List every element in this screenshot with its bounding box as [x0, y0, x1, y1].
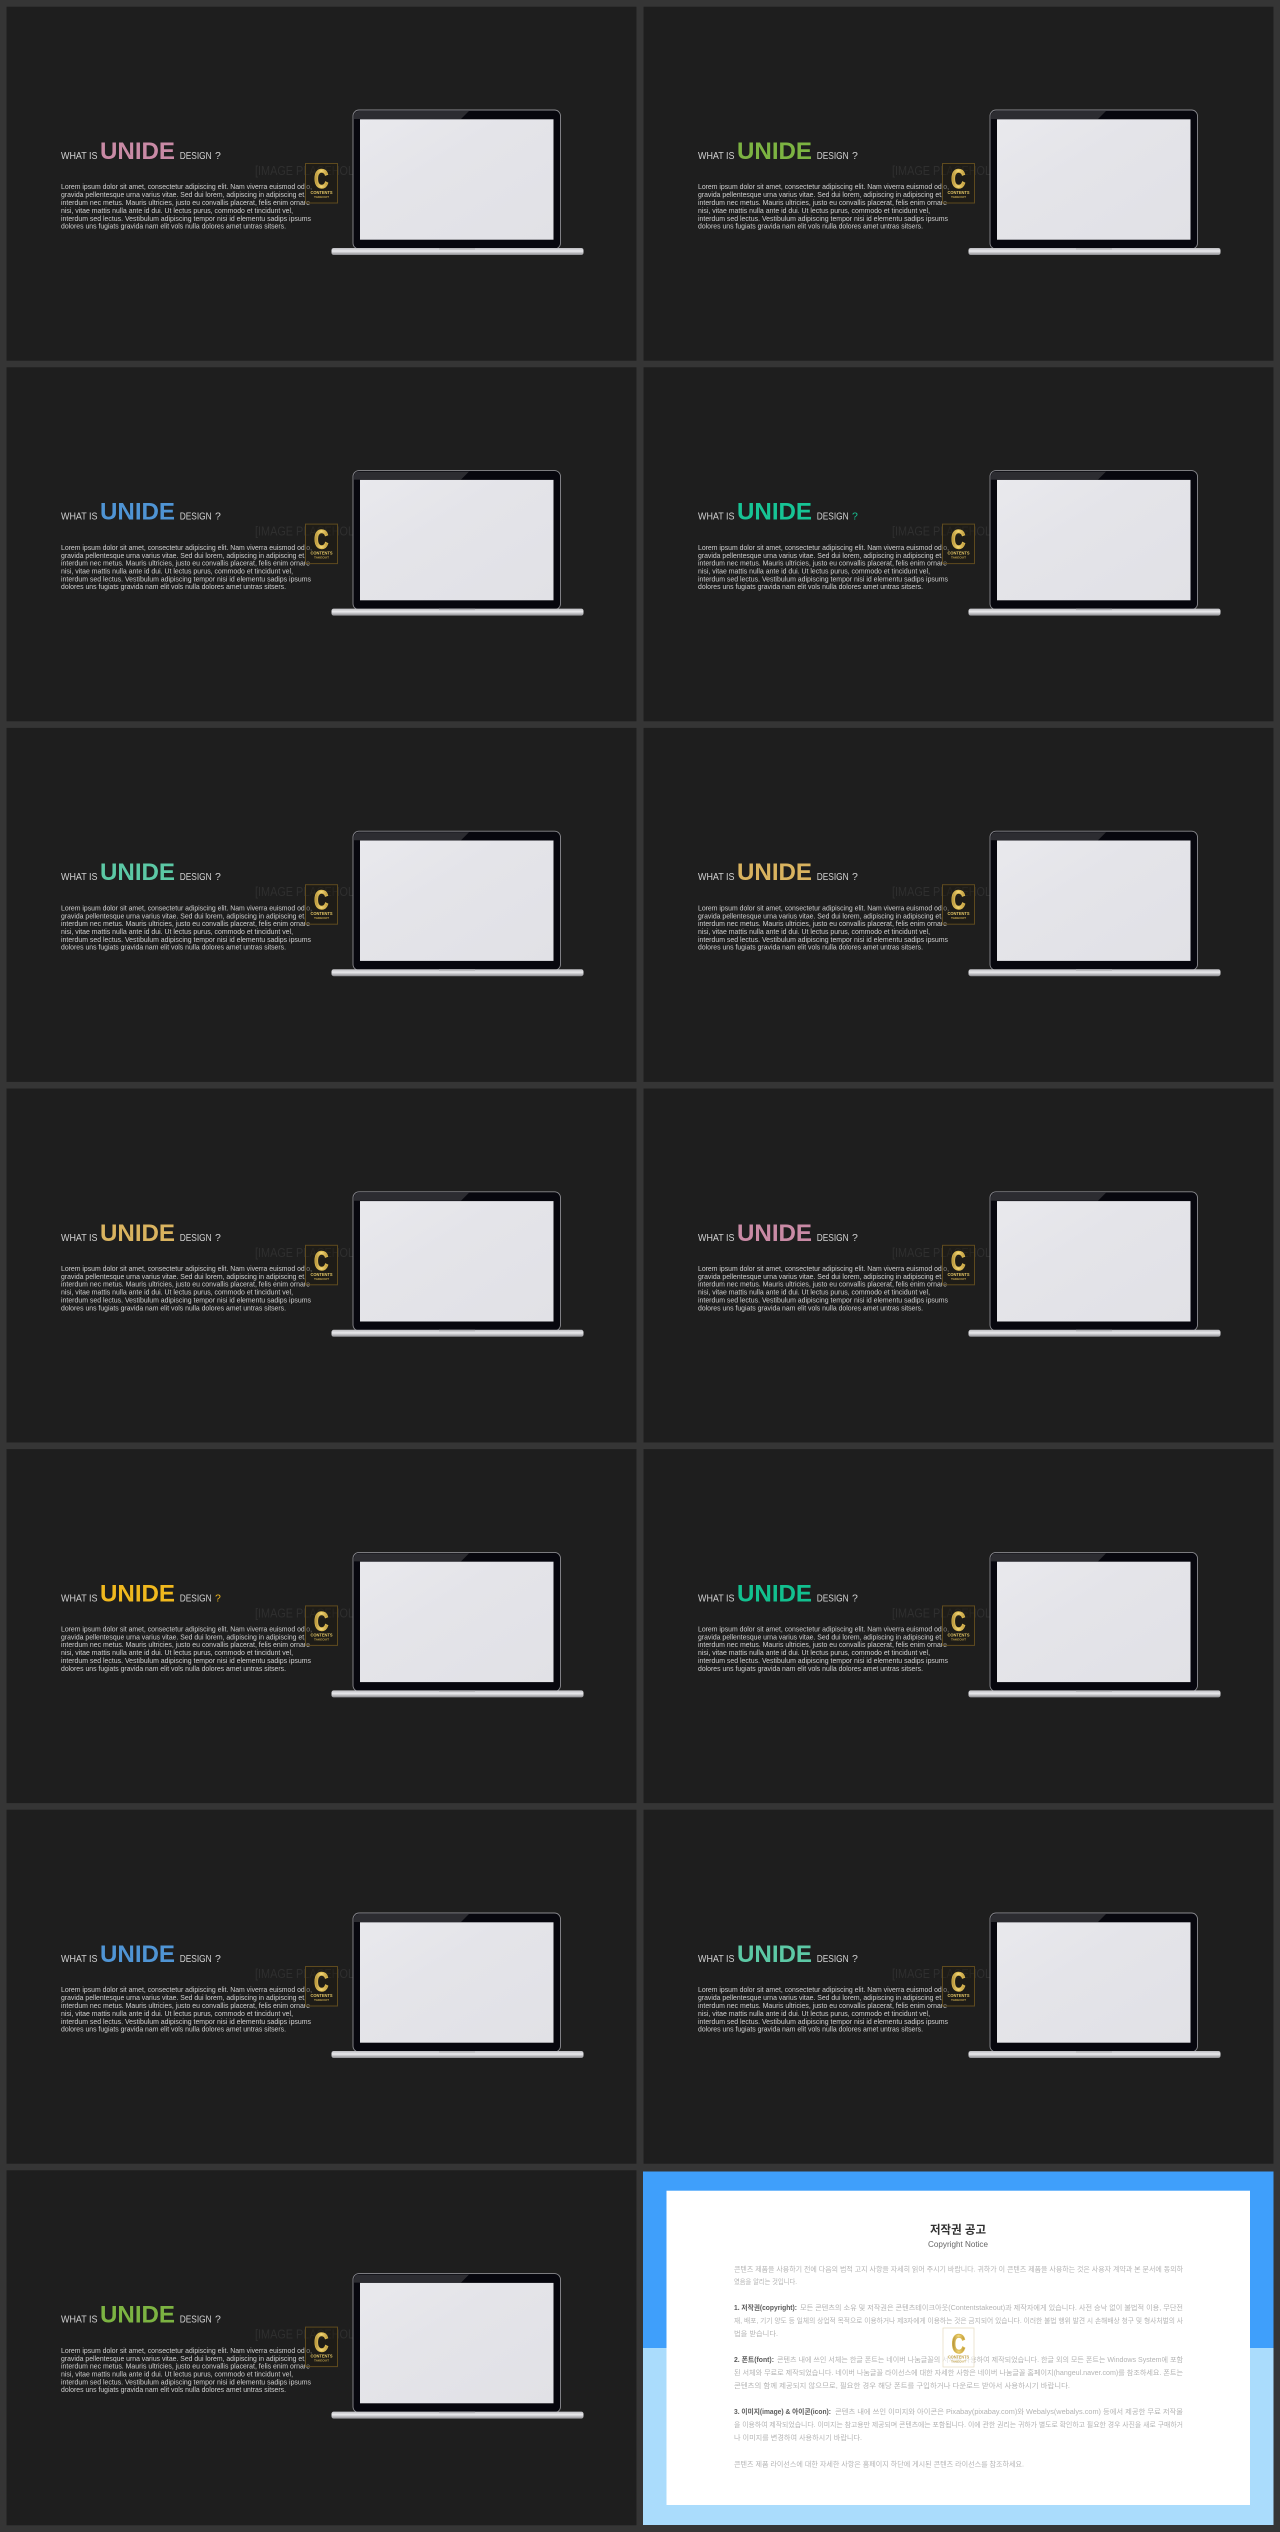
badge: contents takeout centre	[943, 2328, 974, 2367]
image placeholder watermark: [IMAGE PLACEHOLDER]	[255, 1966, 380, 1981]
badge: contents takeout	[942, 1245, 974, 1285]
body text: interdum sed lectus. Vestibulum adipiscing tempor nisi id elementu sadips ipsums	[61, 1656, 311, 1665]
body text: gravida pellentesque urna varius vitae. Sed dui lorem, adipiscing in adipiscing et,	[61, 911, 306, 920]
heading	[61, 1580, 221, 1607]
heading	[698, 1941, 858, 1968]
body text: interdum sed lectus. Vestibulum adipiscing tempor nisi id elementu sadips ipsums	[698, 1296, 948, 1305]
body text	[61, 1264, 312, 1312]
body text	[61, 903, 312, 952]
body text: dolores uns fugiats gravida nam elit vols nulla dolores amet untras sitsers.	[61, 1303, 286, 1312]
laptop	[332, 2274, 584, 2419]
section 2 font: 콘텐츠의 함께 제공되지 않으므로, 필요한 경우 해당 폰트를 구입하거나 다운로드 받아서 사용하시기 바랍니다.	[734, 2381, 1070, 2390]
panel: slide 1 pink	[6, 7, 636, 361]
heading: WHAT IS	[698, 150, 734, 162]
heading: DESIGN	[817, 1232, 849, 1244]
badge: contents takeout: TAKEOUT	[314, 195, 329, 199]
badge: contents takeout	[306, 524, 338, 564]
badge: contents takeout: C	[951, 164, 966, 194]
body text	[61, 182, 312, 230]
laptop	[968, 1913, 1220, 2058]
image placeholder watermark: [IMAGE PLACEHOLDER]	[892, 524, 1017, 539]
badge: contents takeout: C	[951, 1606, 966, 1636]
heading: UNIDE	[100, 859, 175, 886]
badge: contents takeout	[306, 1966, 338, 2006]
body text: nisi, vitae mattis nulla ante id dui. Ut lectus purus, commodo et tincidunt vel,	[61, 2369, 293, 2378]
body text: dolores uns fugiats gravida nam elit vols nulla dolores amet untras sitsers.	[61, 582, 286, 591]
body text: gravida pellentesque urna varius vitae. Sed dui lorem, adipiscing in adipiscing et,	[698, 1633, 943, 1642]
badge: contents takeout: TAKEOUT	[314, 916, 329, 920]
laptop	[968, 110, 1220, 255]
body text: gravida pellentesque urna varius vitae. Sed dui lorem, adipiscing in adipiscing et,	[61, 1272, 306, 1281]
image placeholder watermark: [IMAGE PLACEHOLDER]	[255, 524, 380, 539]
body text: nisi, vitae mattis nulla ante id dui. Ut lectus purus, commodo et tincidunt vel,	[698, 2009, 930, 2018]
body text: interdum nec metus. Mauris ultricies, justo eu convallis placerat, felis enim ornare	[61, 919, 310, 928]
body text: interdum sed lectus. Vestibulum adipiscing tempor nisi id elementu sadips ipsums	[698, 2017, 948, 2026]
body text: dolores uns fugiats gravida nam elit vols nulla dolores amet untras sitsers.	[698, 2024, 923, 2034]
body text	[698, 1625, 949, 1673]
heading: ?	[852, 871, 858, 883]
laptop	[968, 831, 1220, 976]
badge: contents takeout: TAKEOUT	[314, 2359, 329, 2363]
body text	[698, 1985, 949, 2034]
heading: DESIGN	[817, 511, 849, 523]
image placeholder watermark: [IMAGE PLACEHOLDER]	[255, 884, 380, 899]
heading: WHAT IS	[698, 1232, 734, 1244]
badge: contents takeout	[942, 1606, 974, 1645]
body text: gravida pellentesque urna varius vitae. Sed dui lorem, adipiscing in adipiscing et,	[698, 911, 943, 920]
body text: dolores uns fugiats gravida nam elit vols nulla dolores amet untras sitsers.	[698, 582, 923, 591]
image placeholder watermark: [IMAGE PLACEHOLDER]	[255, 1245, 380, 1260]
heading: DESIGN	[180, 1592, 212, 1604]
body text: nisi, vitae mattis nulla ante id dui. Ut lectus purus, commodo et tincidunt vel,	[698, 206, 930, 215]
body text	[698, 903, 949, 952]
panel: slide 4 teal	[644, 367, 1274, 721]
badge: contents takeout: CONTENTS	[310, 911, 333, 916]
heading	[698, 859, 858, 886]
panel: slide 10 teal	[644, 1449, 1274, 1803]
laptop	[968, 1552, 1220, 1697]
badge: contents takeout: C	[951, 885, 966, 915]
badge: contents takeout: CONTENTS	[310, 1632, 333, 1637]
heading: DESIGN	[817, 1953, 849, 1965]
image placeholder watermark: [IMAGE PLACEHOLDER]	[255, 1605, 380, 1620]
heading: DESIGN	[180, 150, 212, 162]
heading	[698, 499, 858, 526]
badge: contents takeout: C	[314, 1606, 328, 1636]
section 1 copyright: 모든 콘텐츠의 소유 및 저작권은 콘텐츠테이크아웃(Contentstakeout)과 제작자에게 있습니다. 사전 승낙 없이 불법적 이용, 무단전	[800, 2303, 1183, 2312]
badge: contents takeout: CONTENTS	[310, 1993, 333, 1998]
body text: dolores uns fugiats gravida nam elit vols nulla dolores amet untras sitsers.	[61, 943, 286, 952]
badge: contents takeout	[306, 2327, 338, 2367]
heading: ?	[852, 1232, 858, 1244]
badge: contents takeout: TAKEOUT	[314, 1277, 329, 1281]
intro paragraph: 였음을 알리는 것입니다.	[734, 2277, 797, 2286]
heading: WHAT IS	[61, 1232, 98, 1244]
heading: DESIGN	[817, 871, 849, 883]
heading: WHAT IS	[61, 871, 98, 883]
heading: ?	[215, 1232, 221, 1244]
body text: dolores uns fugiats gravida nam elit vols nulla dolores amet untras sitsers.	[61, 222, 286, 230]
laptop	[332, 1913, 584, 2058]
body text: interdum nec metus. Mauris ultricies, justo eu convallis placerat, felis enim ornare	[61, 2361, 310, 2370]
badge: contents takeout centre: C	[952, 2329, 966, 2359]
badge: contents takeout: C	[314, 885, 328, 915]
badge: contents takeout	[942, 524, 974, 564]
laptop	[332, 1552, 584, 1697]
heading: UNIDE	[100, 138, 175, 165]
body text: nisi, vitae mattis nulla ante id dui. Ut lectus purus, commodo et tincidunt vel,	[61, 206, 293, 215]
laptop	[332, 110, 584, 255]
section 3 image and icon: 콘텐츠 내에 쓰인 이미지와 아이콘은 Pixabay(pixabay.com)와 Webalys(webalys.com) 등에서 제공한 무료 저작물	[835, 2407, 1184, 2416]
section 3 image and icon: 을 이용하여 제작되었습니다. 이미지는 참고용만 제공되며 콘텐츠에는 포함됩니다. 이에 관한 권리는 귀하가 별도로 확인하고 필요한 경우 사진을 새로 구매하거	[734, 2420, 1183, 2429]
body text: interdum nec metus. Mauris ultricies, justo eu convallis placerat, felis enim ornare	[61, 1280, 310, 1289]
heading: ?	[852, 1592, 858, 1604]
heading: WHAT IS	[698, 1953, 734, 1965]
section 1 copyright: 재, 배포, 기기 양도 등 일체의 상업적 목적으로 이용하거나 제3자에게 이용하는 것은 금지되어 있습니다. 이러한 불법 행위 발견 시 손해배상 청구 및 형사처벌의 사	[734, 2316, 1184, 2325]
laptop	[332, 831, 584, 976]
section 1 copyright: 1. 저작권(copyright):	[734, 2303, 797, 2312]
badge: contents takeout: CONTENTS	[310, 551, 333, 556]
body text: interdum nec metus. Mauris ultricies, justo eu convallis placerat, felis enim ornare	[61, 198, 310, 207]
body text: dolores uns fugiats gravida nam elit vols nulla dolores amet untras sitsers.	[61, 2024, 286, 2034]
body text: Lorem ipsum dolor sit amet, consectetur adipiscing elit. Nam viverra euismod odio,	[61, 1264, 312, 1273]
heading: UNIDE	[100, 1941, 175, 1968]
body text: gravida pellentesque urna varius vitae. Sed dui lorem, adipiscing in adipiscing et,	[698, 1993, 943, 2002]
body text: nisi, vitae mattis nulla ante id dui. Ut lectus purus, commodo et tincidunt vel,	[698, 927, 930, 936]
body text: Lorem ipsum dolor sit amet, consectetur adipiscing elit. Nam viverra euismod odio,	[698, 1264, 949, 1273]
body text: interdum nec metus. Mauris ultricies, justo eu convallis placerat, felis enim ornare	[698, 919, 947, 928]
body text: Lorem ipsum dolor sit amet, consectetur adipiscing elit. Nam viverra euismod odio,	[698, 1625, 949, 1634]
panel: slide 12 mint	[644, 1810, 1274, 2164]
body text: dolores uns fugiats gravida nam elit vols nulla dolores amet untras sitsers.	[698, 943, 923, 952]
badge: contents takeout: CONTENTS	[948, 190, 970, 195]
heading: WHAT IS	[61, 1953, 98, 1965]
badge: contents takeout: CONTENTS	[310, 2354, 333, 2359]
badge: contents takeout: TAKEOUT	[951, 916, 966, 920]
heading: ?	[215, 150, 221, 162]
badge: contents takeout: C	[951, 1967, 966, 1997]
panel: slide 13 green	[6, 2170, 636, 2525]
copyright title: 저작권 공고	[930, 2222, 986, 2236]
body text: Lorem ipsum dolor sit amet, consectetur adipiscing elit. Nam viverra euismod odio,	[61, 2346, 312, 2355]
heading: UNIDE	[737, 859, 812, 886]
body text: Lorem ipsum dolor sit amet, consectetur adipiscing elit. Nam viverra euismod odio,	[61, 543, 312, 552]
badge: contents takeout	[942, 164, 974, 203]
section 2 font: 된 서체와 무료로 제작되었습니다. 네이버 나눔글꼴 라이선스에 대한 자세한 사항은 네이버 나눔글꼴 홈페이지(hangeul.naver.com)를 참조하세요. 폰트는	[734, 2368, 1184, 2377]
badge: contents takeout: C	[314, 2328, 328, 2358]
section 1 copyright: 법을 받습니다.	[734, 2329, 778, 2338]
heading	[61, 1941, 221, 1968]
badge: contents takeout: TAKEOUT	[951, 1637, 966, 1641]
heading: UNIDE	[100, 499, 175, 526]
body text: interdum nec metus. Mauris ultricies, justo eu convallis placerat, felis enim ornare	[698, 1280, 947, 1289]
badge: contents takeout: C	[951, 525, 966, 555]
body text	[698, 543, 949, 591]
badge: contents takeout	[306, 885, 338, 924]
section 3 image and icon	[734, 2407, 1184, 2442]
body text: nisi, vitae mattis nulla ante id dui. Ut lectus purus, commodo et tincidunt vel,	[61, 566, 293, 575]
badge: contents takeout: C	[314, 1967, 328, 1997]
heading: UNIDE	[737, 138, 812, 165]
image placeholder watermark: [IMAGE PLACEHOLDER]	[892, 884, 1017, 899]
panel: slide 5 mint	[6, 728, 636, 1082]
badge: contents takeout: CONTENTS	[310, 1272, 333, 1277]
body text: nisi, vitae mattis nulla ante id dui. Ut lectus purus, commodo et tincidunt vel,	[698, 566, 930, 575]
badge: contents takeout: CONTENTS	[948, 1272, 970, 1277]
badge: contents takeout: TAKEOUT	[951, 1998, 966, 2002]
body text: gravida pellentesque urna varius vitae. Sed dui lorem, adipiscing in adipiscing et,	[698, 190, 943, 199]
heading: UNIDE	[737, 1220, 812, 1247]
body text: interdum sed lectus. Vestibulum adipiscing tempor nisi id elementu sadips ipsums	[698, 1656, 948, 1665]
heading: DESIGN	[180, 511, 212, 523]
body text	[61, 1625, 312, 1673]
body text: dolores uns fugiats gravida nam elit vols nulla dolores amet untras sitsers.	[61, 2385, 286, 2394]
body text: gravida pellentesque urna varius vitae. Sed dui lorem, adipiscing in adipiscing et,	[61, 551, 306, 560]
badge: contents takeout: TAKEOUT	[314, 556, 329, 560]
body text: gravida pellentesque urna varius vitae. Sed dui lorem, adipiscing in adipiscing et,	[698, 551, 943, 560]
panel: slide 6 gold	[644, 728, 1274, 1082]
heading: WHAT IS	[61, 2314, 98, 2326]
image placeholder watermark: [IMAGE PLACEHOLDER]	[892, 1966, 1017, 1981]
heading: DESIGN	[817, 150, 849, 162]
panel: slide 7 gold	[6, 1088, 636, 1442]
heading: WHAT IS	[61, 1592, 98, 1604]
panel: slide 3 blue	[6, 367, 636, 721]
heading: DESIGN	[180, 871, 212, 883]
heading: ?	[852, 150, 858, 162]
section 3 image and icon: 나 이미지를 변경하여 사용하시기 바랍니다.	[734, 2433, 862, 2442]
badge: contents takeout: CONTENTS	[948, 911, 970, 916]
body text: interdum nec metus. Mauris ultricies, justo eu convallis placerat, felis enim ornare	[698, 198, 947, 207]
body text: interdum sed lectus. Vestibulum adipiscing tempor nisi id elementu sadips ipsums	[61, 1296, 311, 1305]
heading: ?	[215, 1953, 221, 1965]
body text: interdum sed lectus. Vestibulum adipiscing tempor nisi id elementu sadips ipsums	[61, 214, 311, 223]
heading: UNIDE	[100, 1580, 175, 1607]
body text: interdum sed lectus. Vestibulum adipiscing tempor nisi id elementu sadips ipsums	[698, 574, 948, 583]
heading: ?	[215, 2314, 221, 2326]
body text: Lorem ipsum dolor sit amet, consectetur adipiscing elit. Nam viverra euismod odio,	[61, 903, 312, 912]
heading: ?	[215, 511, 221, 523]
body text: Lorem ipsum dolor sit amet, consectetur adipiscing elit. Nam viverra euismod odio,	[698, 182, 949, 191]
laptop	[332, 471, 584, 616]
body text: Lorem ipsum dolor sit amet, consectetur adipiscing elit. Nam viverra euismod odio,	[61, 1985, 312, 1994]
heading	[698, 1220, 858, 1247]
panel: copyright notice	[643, 2172, 1274, 2525]
heading: WHAT IS	[698, 871, 734, 883]
badge: contents takeout: C	[951, 1246, 966, 1276]
section 2 font: 콘텐츠 내에 쓰인 서체는 한글 폰트는 네이버 나눔글꼴의 서체를 사용하여 제작되었습니다. 한글 외의 모든 폰트는 Windows System에 포함	[777, 2355, 1184, 2364]
laptop	[332, 1192, 584, 1337]
heading: ?	[852, 1953, 858, 1965]
body text: Lorem ipsum dolor sit amet, consectetur adipiscing elit. Nam viverra euismod odio,	[698, 1985, 949, 1994]
heading: ?	[215, 1592, 221, 1604]
badge: contents takeout: C	[314, 525, 328, 555]
body text: gravida pellentesque urna varius vitae. Sed dui lorem, adipiscing in adipiscing et,	[61, 1633, 306, 1642]
body text: interdum sed lectus. Vestibulum adipiscing tempor nisi id elementu sadips ipsums	[61, 574, 311, 583]
license note: 콘텐츠 제품 라이선스에 대한 자세한 사항은 홈페이지 하단에 게시된 콘텐츠 라이선스를 참조하세요.	[734, 2459, 1024, 2468]
heading	[61, 138, 221, 165]
heading	[61, 1220, 221, 1247]
heading: UNIDE	[100, 1220, 175, 1247]
badge: contents takeout: C	[314, 164, 328, 194]
heading: DESIGN	[817, 1592, 849, 1604]
heading: DESIGN	[180, 2314, 212, 2326]
body text: interdum nec metus. Mauris ultricies, justo eu convallis placerat, felis enim ornare	[61, 2001, 310, 2010]
body text: dolores uns fugiats gravida nam elit vols nulla dolores amet untras sitsers.	[698, 222, 923, 230]
badge: contents takeout	[306, 1245, 338, 1285]
body text: Lorem ipsum dolor sit amet, consectetur adipiscing elit. Nam viverra euismod odio,	[698, 903, 949, 912]
body text: Lorem ipsum dolor sit amet, consectetur adipiscing elit. Nam viverra euismod odio,	[698, 543, 949, 552]
laptop	[968, 471, 1220, 616]
heading: WHAT IS	[61, 511, 98, 523]
body text: gravida pellentesque urna varius vitae. Sed dui lorem, adipiscing in adipiscing et,	[61, 190, 306, 199]
body text: interdum nec metus. Mauris ultricies, justo eu convallis placerat, felis enim ornare	[698, 1640, 947, 1649]
body text: interdum nec metus. Mauris ultricies, justo eu convallis placerat, felis enim ornare	[698, 558, 947, 567]
body text	[61, 2346, 312, 2394]
body text: nisi, vitae mattis nulla ante id dui. Ut lectus purus, commodo et tincidunt vel,	[61, 1648, 293, 1657]
section 1 copyright	[734, 2303, 1184, 2338]
heading	[61, 859, 221, 886]
heading: DESIGN	[180, 1232, 212, 1244]
body text	[61, 1985, 312, 2034]
body text: nisi, vitae mattis nulla ante id dui. Ut lectus purus, commodo et tincidunt vel,	[698, 1648, 930, 1657]
section 2 font: 2. 폰트(font):	[734, 2356, 774, 2364]
heading	[698, 1580, 858, 1607]
heading	[61, 2302, 221, 2329]
body text: gravida pellentesque urna varius vitae. Sed dui lorem, adipiscing in adipiscing et,	[61, 2354, 306, 2363]
heading: UNIDE	[737, 499, 812, 526]
badge: contents takeout centre: CONTENTS	[948, 2354, 969, 2360]
badge: contents takeout: TAKEOUT	[951, 195, 966, 199]
body text: nisi, vitae mattis nulla ante id dui. Ut lectus purus, commodo et tincidunt vel,	[61, 1288, 293, 1297]
body text	[698, 182, 949, 230]
body text: interdum sed lectus. Vestibulum adipiscing tempor nisi id elementu sadips ipsums	[698, 214, 948, 223]
body text: interdum sed lectus. Vestibulum adipiscing tempor nisi id elementu sadips ipsums	[61, 935, 311, 944]
badge: contents takeout: CONTENTS	[948, 1993, 970, 1998]
body text	[698, 1264, 949, 1312]
badge: contents takeout	[306, 164, 338, 203]
section 3 image and icon: 3. 이미지(image) & 아이콘(icon):	[734, 2407, 831, 2416]
badge: contents takeout	[306, 1606, 338, 1645]
body text: dolores uns fugiats gravida nam elit vols nulla dolores amet untras sitsers.	[698, 1664, 923, 1673]
intro paragraph	[734, 2264, 1184, 2286]
body text: interdum sed lectus. Vestibulum adipiscing tempor nisi id elementu sadips ipsums	[698, 935, 948, 944]
laptop	[968, 1192, 1220, 1337]
body text: interdum sed lectus. Vestibulum adipiscing tempor nisi id elementu sadips ipsums	[61, 2377, 311, 2386]
heading: UNIDE	[100, 2302, 175, 2329]
body text: nisi, vitae mattis nulla ante id dui. Ut lectus purus, commodo et tincidunt vel,	[61, 2009, 293, 2018]
panel: slide 8 pink	[644, 1088, 1274, 1442]
body text: interdum nec metus. Mauris ultricies, justo eu convallis placerat, felis enim ornare	[61, 1640, 310, 1649]
heading: WHAT IS	[698, 1592, 734, 1604]
body text: gravida pellentesque urna varius vitae. Sed dui lorem, adipiscing in adipiscing et,	[698, 1272, 943, 1281]
body text: gravida pellentesque urna varius vitae. Sed dui lorem, adipiscing in adipiscing et,	[61, 1993, 306, 2002]
badge: contents takeout: TAKEOUT	[951, 556, 966, 560]
section 2 font	[734, 2355, 1184, 2390]
badge: contents takeout	[942, 885, 974, 924]
badge: contents takeout: CONTENTS	[948, 551, 970, 556]
body text: nisi, vitae mattis nulla ante id dui. Ut lectus purus, commodo et tincidunt vel,	[698, 1288, 930, 1297]
badge: contents takeout: TAKEOUT	[314, 1637, 329, 1641]
copyright subtitle: Copyright Notice	[928, 2240, 989, 2249]
image placeholder watermark: [IMAGE PLACEHOLDER]	[255, 163, 380, 178]
image placeholder watermark: [IMAGE PLACEHOLDER]	[255, 2327, 380, 2342]
panel: slide 11 blue	[6, 1810, 636, 2164]
panel: slide 2 green	[644, 7, 1274, 361]
panel: slide 9 yellow	[6, 1449, 636, 1803]
heading: ?	[215, 871, 221, 883]
heading: UNIDE	[737, 1580, 812, 1607]
badge: contents takeout: TAKEOUT	[314, 1998, 329, 2002]
heading: UNIDE	[737, 1941, 812, 1968]
heading: WHAT IS	[698, 511, 734, 523]
image placeholder watermark: [IMAGE PLACEHOLDER]	[892, 1605, 1017, 1620]
heading: WHAT IS	[61, 150, 98, 162]
body text: interdum nec metus. Mauris ultricies, justo eu convallis placerat, felis enim ornare	[61, 558, 310, 567]
image placeholder watermark: [IMAGE PLACEHOLDER]	[892, 163, 1017, 178]
body text: Lorem ipsum dolor sit amet, consectetur adipiscing elit. Nam viverra euismod odio,	[61, 1625, 312, 1634]
heading	[698, 138, 858, 165]
body text: nisi, vitae mattis nulla ante id dui. Ut lectus purus, commodo et tincidunt vel,	[61, 927, 293, 936]
heading	[61, 499, 221, 526]
badge: contents takeout: C	[314, 1246, 328, 1276]
body text: dolores uns fugiats gravida nam elit vols nulla dolores amet untras sitsers.	[61, 1664, 286, 1673]
heading: DESIGN	[180, 1953, 212, 1965]
badge: contents takeout	[942, 1966, 974, 2006]
badge: contents takeout: CONTENTS	[310, 190, 333, 195]
image placeholder watermark: [IMAGE PLACEHOLDER]	[892, 1245, 1017, 1260]
heading: ?	[852, 511, 858, 523]
badge: contents takeout: TAKEOUT	[951, 1277, 966, 1281]
body text: Lorem ipsum dolor sit amet, consectetur adipiscing elit. Nam viverra euismod odio,	[61, 182, 312, 191]
body text: dolores uns fugiats gravida nam elit vols nulla dolores amet untras sitsers.	[698, 1303, 923, 1312]
badge: contents takeout: CONTENTS	[948, 1632, 970, 1637]
intro paragraph: 콘텐츠 제품을 사용하기 전에 다음의 법적 고지 사항을 자세히 읽어 주시기 바랍니다. 귀하가 이 콘텐츠 제품을 사용하는 것은 사용자 계약과 본 문서에 동의하	[734, 2264, 1184, 2273]
body text: interdum sed lectus. Vestibulum adipiscing tempor nisi id elementu sadips ipsums	[61, 2017, 311, 2026]
body text: interdum nec metus. Mauris ultricies, justo eu convallis placerat, felis enim ornare	[698, 2001, 947, 2010]
badge: contents takeout centre: TAKEOUT	[951, 2360, 966, 2364]
body text	[61, 543, 312, 591]
